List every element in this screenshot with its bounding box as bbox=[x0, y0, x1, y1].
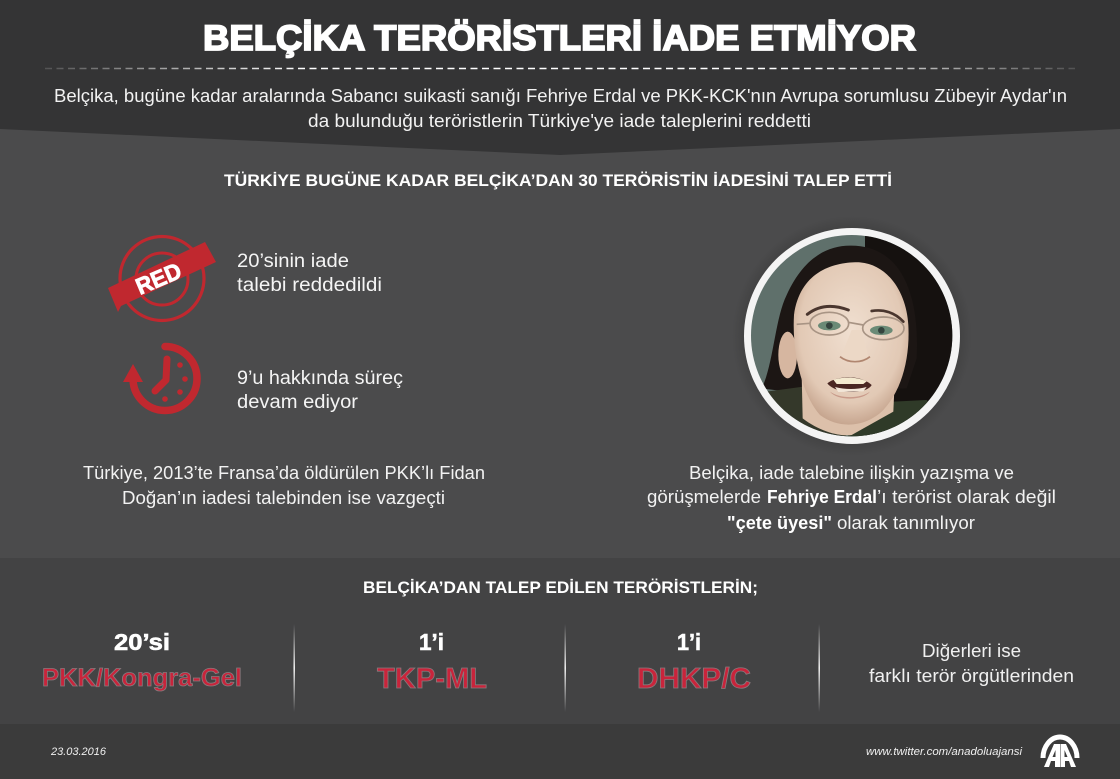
stat: others: Diğerleri ise bbox=[922, 641, 1021, 661]
text: Belgium definition bbox=[647, 463, 1056, 533]
intro text: da bulunduğu teröristlerin Türkiye'ye iade taleplerini reddetti bbox=[308, 111, 811, 131]
source url: www.twitter.com/anadoluajansi bbox=[866, 746, 1023, 758]
stat: TKP-ML: TKP-ML bbox=[377, 663, 487, 695]
stat: DHKP/C bbox=[637, 629, 751, 695]
stat: TKP-ML: 1’i bbox=[419, 629, 444, 655]
text: Belgium definition: ’ı terörist olarak değil bbox=[877, 487, 1056, 507]
stat: TKP-ML bbox=[377, 629, 487, 695]
text: rejected: 20’sinin iade bbox=[237, 251, 349, 272]
intro text bbox=[54, 86, 1067, 131]
text: Belgium definition: olarak tanımlıyor bbox=[837, 513, 975, 533]
panel: organisations bbox=[0, 558, 1120, 724]
text: ongoing: 9’u hakkında süreç bbox=[237, 368, 403, 389]
text: Belgium definition: "çete üyesi" bbox=[727, 513, 832, 533]
stat: PKK: PKK/Kongra-Gel bbox=[42, 664, 242, 692]
panel: header bbox=[0, 0, 1120, 155]
section heading: TÜRKİYE BUGÜNE KADAR BELÇİKA’DAN 30 TERÖRİSTİN İADESİNİ TALEP ETTİ bbox=[224, 171, 892, 190]
text: Fidan Doğan: Türkiye, 2013’te Fransa’da öldürülen PKK’lı Fidan bbox=[83, 463, 485, 483]
text: Belgium definition: Fehriye Erdal bbox=[767, 487, 877, 507]
organisations heading: BELÇİKA’DAN TALEP EDİLEN TERÖRİSTLERİN; bbox=[363, 578, 758, 597]
stat: DHKP/C: 1’i bbox=[677, 629, 701, 655]
stat: others: farklı terör örgütlerinden bbox=[869, 666, 1074, 686]
intro text: Belçika, bugüne kadar aralarında Sabancı suikasti sanığı Fehriye Erdal ve PKK-KCK'nın Avrupa sorumlusu Zübeyir Aydar'ın bbox=[54, 86, 1067, 106]
stat: others bbox=[869, 641, 1074, 686]
text: Belgium definition: görüşmelerde bbox=[647, 487, 761, 507]
stat: DHKP/C: DHKP/C bbox=[637, 663, 751, 695]
text: ongoing bbox=[237, 368, 403, 413]
text: rejected bbox=[237, 251, 382, 296]
photo: Fehriye Erdal bbox=[744, 228, 960, 444]
text: ongoing: devam ediyor bbox=[237, 392, 359, 413]
date: 23.03.2016 bbox=[50, 746, 107, 758]
icon: RED stamp bbox=[108, 236, 216, 320]
stat: PKK: 20’si bbox=[114, 629, 170, 655]
icon: clock with arrow bbox=[123, 346, 197, 410]
icon: AA logo bbox=[1043, 737, 1077, 767]
text: Belgium definition: Belçika, iade talebine ilişkin yazışma ve bbox=[689, 463, 1014, 483]
icon: RED stamp: RED bbox=[132, 257, 185, 300]
stat: PKK bbox=[42, 629, 242, 692]
text: rejected: talebi reddedildi bbox=[237, 275, 382, 296]
panel: footer bbox=[0, 724, 1120, 779]
text: Fidan Doğan: Doğan’ın iadesi talebinden ise vazgeçti bbox=[122, 488, 445, 508]
text: Fidan Doğan bbox=[83, 463, 485, 508]
title: BELÇİKA TERÖRİSTLERİ İADE ETMİYOR bbox=[203, 19, 916, 58]
